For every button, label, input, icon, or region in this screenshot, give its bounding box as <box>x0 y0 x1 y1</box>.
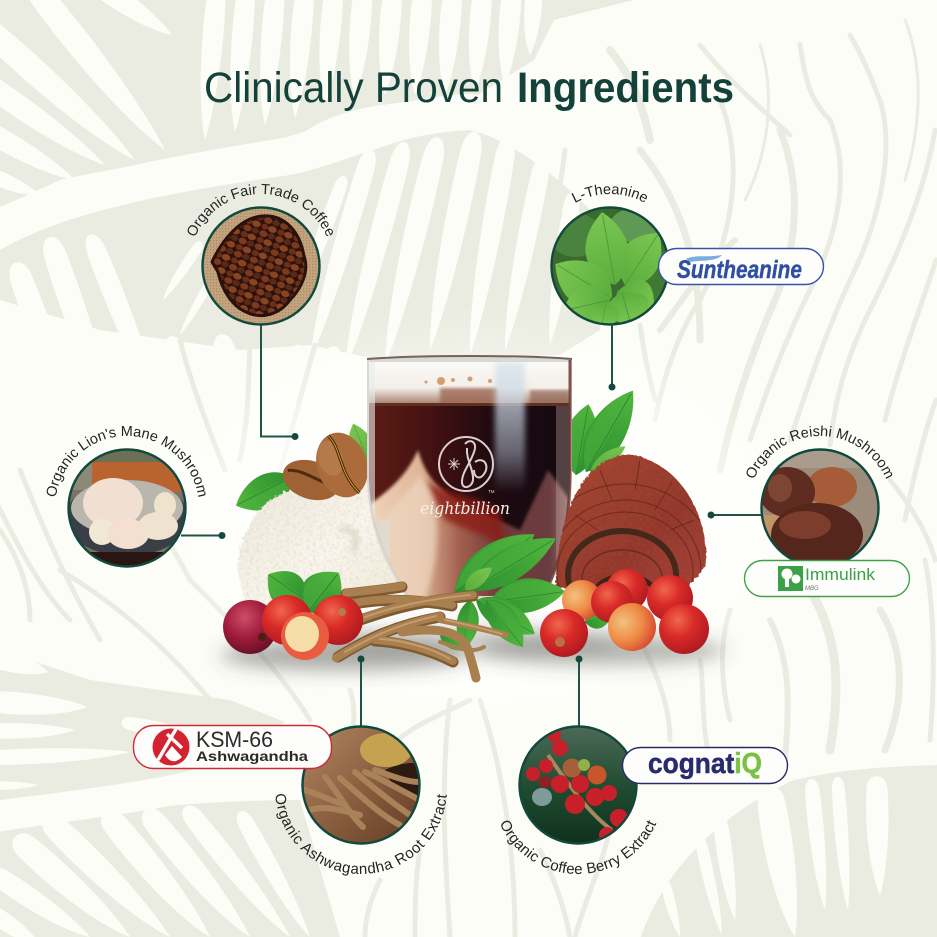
central tea leaves <box>435 519 615 657</box>
right coffee berries <box>540 569 709 657</box>
connector <box>708 512 761 518</box>
ksm-66 badge: Ashwagandha <box>196 748 308 764</box>
title: Clinically Proven <box>204 64 503 112</box>
glass of coffee <box>366 356 573 602</box>
cognatiq badge <box>622 748 788 784</box>
ingredient: organic reishi mushroom <box>708 426 910 598</box>
coffee beans <box>278 426 376 507</box>
photo: reishi pieces <box>762 450 878 560</box>
connector <box>358 656 364 727</box>
glass logo wordmark: eightbillion <box>420 499 510 519</box>
leaves behind the mushroom and glass <box>229 419 383 522</box>
midrib bands <box>0 112 640 240</box>
ingredient: organic fair trade coffee <box>188 184 333 440</box>
suntheanine badge: Suntheanine <box>677 256 802 284</box>
title: Ingredients <box>517 64 734 112</box>
trademark: TM <box>488 489 495 494</box>
white haze around hero <box>205 360 745 680</box>
label: Organic Coffee Berry Extract <box>501 820 656 874</box>
label: L-Theanine <box>572 184 647 203</box>
top-left fan <box>20 0 174 159</box>
lion's mane mushroom <box>238 477 400 612</box>
photo: tea leaves <box>552 208 666 324</box>
photo: coffee beans in burlap <box>204 208 318 324</box>
ashwagandha roots <box>336 586 506 678</box>
label: Organic Reishi Mushroom <box>746 426 892 479</box>
below-band center fan <box>300 146 380 362</box>
ingredient: organic ashwagandha root extract <box>132 656 447 876</box>
immulink badge <box>744 560 910 596</box>
connector <box>608 324 616 390</box>
leaves behind the reishi <box>558 381 647 480</box>
photo: lion's mane in a bowl <box>70 450 184 566</box>
mushroom crease <box>340 529 356 552</box>
lower-left horizontal fan <box>0 690 88 719</box>
photo: coffee berries on branch <box>520 728 636 842</box>
connector <box>261 324 298 440</box>
label: Organic Ashwagandha Root Extract <box>276 794 447 876</box>
photo: ashwagandha roots on wood <box>304 728 418 842</box>
reishi mushroom <box>554 454 707 593</box>
top-center fan <box>194 0 227 141</box>
suntheanine badge <box>658 248 824 284</box>
title <box>204 64 734 112</box>
glass logo <box>439 437 493 491</box>
ksm-66 badge: KSM-66 <box>196 727 273 752</box>
ingredient: organic coffee berry extract <box>501 656 788 874</box>
cognatiq badge: cognatiQ <box>648 748 762 780</box>
label: Organic Lion's Mane Mushroom <box>46 426 206 497</box>
left coffee berries <box>223 595 363 660</box>
label: Organic Fair Trade Coffee <box>188 184 333 236</box>
bottom-left fan <box>6 827 138 937</box>
immulink badge: Immulink <box>805 565 876 584</box>
below-band left fan <box>38 233 130 444</box>
bottom-right fan <box>754 784 808 937</box>
hero composition: glass and ingredients <box>205 356 745 680</box>
left leaves above the berries <box>257 559 353 623</box>
ingredient: l-theanine <box>550 184 824 390</box>
ground shadow <box>220 626 725 671</box>
immulink badge: MBG <box>805 586 819 592</box>
ingredient: organic lion's mane mushroom <box>46 426 226 568</box>
connector <box>181 532 226 539</box>
ksm-66 badge <box>134 726 332 768</box>
connector <box>576 656 582 727</box>
